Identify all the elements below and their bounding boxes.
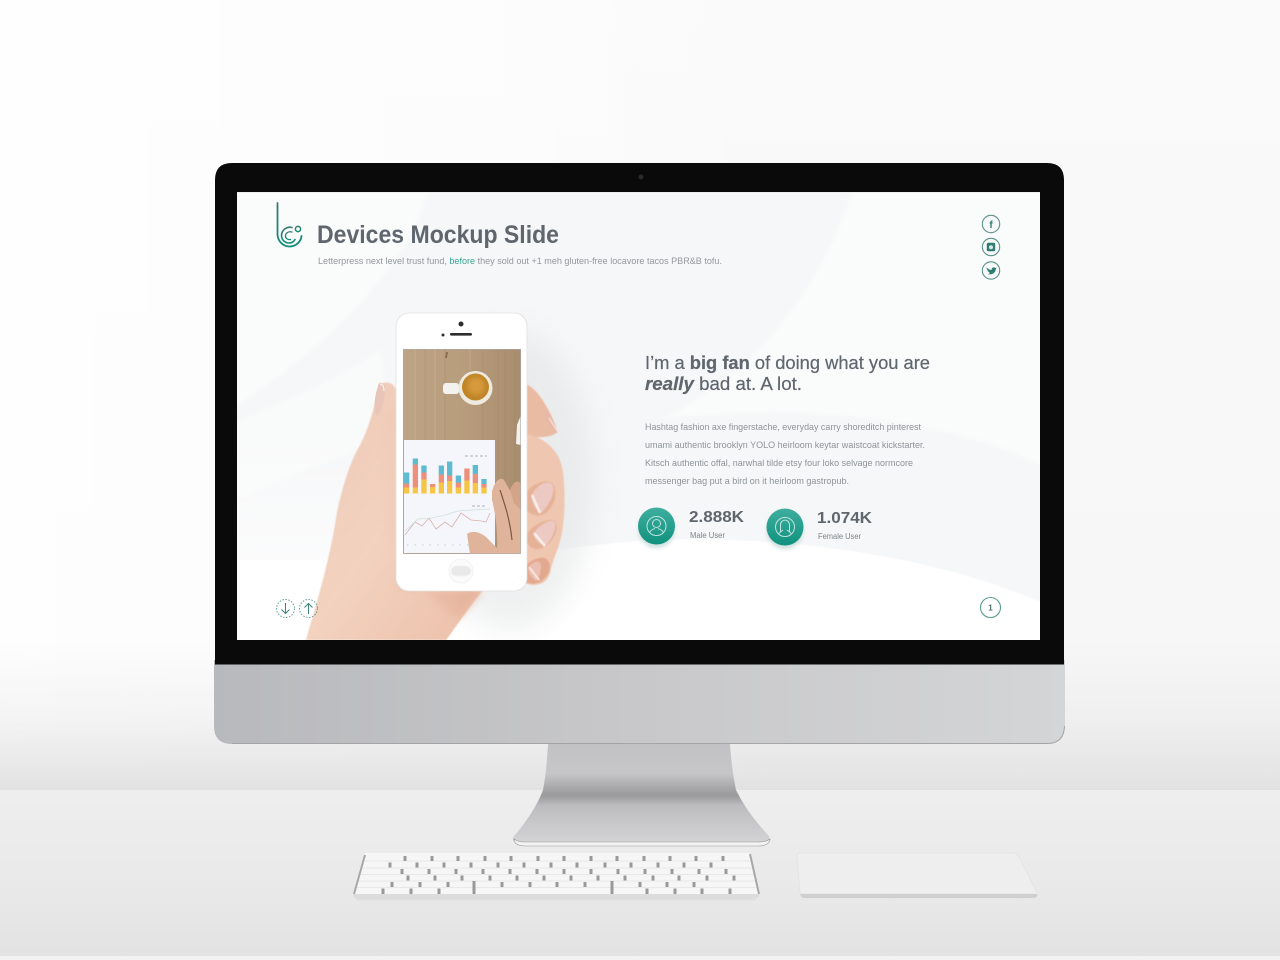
keyboard key gaps — [382, 856, 736, 894]
paper note edge — [516, 416, 520, 445]
keyboard edges — [354, 854, 759, 894]
monitor bezel — [215, 163, 1064, 664]
monitor stand — [513, 744, 770, 846]
palm shading — [434, 592, 484, 620]
keyboard body — [353, 853, 759, 898]
photo frame — [403, 349, 521, 554]
trackpad surface — [797, 853, 1037, 894]
keyboard shadow — [356, 897, 756, 900]
hand on paper — [467, 479, 521, 554]
paper chart — [404, 440, 495, 553]
finger 3 — [527, 520, 557, 549]
title: Devices Mockup Slide — [317, 221, 559, 249]
phone body — [396, 313, 527, 591]
icon: arrow up — [300, 600, 318, 618]
icon: male user — [638, 508, 675, 548]
webcam — [638, 174, 644, 180]
trackpad lip — [800, 894, 1038, 898]
body paragraph: Hashtag fashion axe fingerstache, everyday carry shoreditch pinterest — [645, 422, 921, 432]
body paragraph: umami authentic brooklyn YOLO heirloom keytar waistcoat kickstarter. — [645, 440, 925, 450]
fingers behind phone — [526, 384, 565, 586]
finger 1 — [526, 384, 558, 437]
body paragraph — [645, 422, 925, 486]
finger 4 — [526, 558, 550, 584]
knuckle — [526, 435, 565, 586]
page number — [980, 598, 1000, 618]
trackpad — [797, 853, 1038, 898]
value: 1.074K — [817, 510, 873, 527]
stat: male user — [638, 508, 745, 548]
slide background — [230, 185, 1050, 650]
keyboard row lines — [356, 861, 757, 888]
keyboard front lip — [354, 894, 759, 898]
finger 2 — [528, 482, 556, 516]
logo — [278, 203, 302, 246]
bar chart — [404, 458, 487, 494]
quote heading: really bad at. A lot. — [645, 373, 802, 394]
phone shadow — [472, 343, 588, 628]
social icons — [982, 215, 1000, 279]
monitor chin — [214, 660, 1065, 744]
line chart — [405, 456, 490, 545]
quote heading: I’m a big fan of doing what you are — [645, 352, 930, 373]
subtitle: Letterpress next level trust fund, before they sold out +1 meh gluten-free locavore tacos PBR&B tofu. — [318, 256, 722, 267]
body paragraph: messenger bag put a bird on it heirloom gastropub. — [645, 476, 849, 486]
coffee cup — [443, 371, 492, 405]
wood table — [403, 349, 521, 554]
label: Female User — [818, 532, 861, 541]
phone in hand — [306, 313, 595, 640]
label: Male User — [690, 531, 725, 540]
icon: facebook: f — [989, 220, 993, 231]
hand behind phone — [306, 383, 483, 640]
page number: 1 — [988, 604, 993, 612]
value: 2.888K — [689, 509, 745, 526]
quote heading — [645, 352, 930, 394]
icon: instagram — [982, 238, 1000, 256]
icon: twitter — [982, 262, 1000, 279]
icon: arrow down — [276, 600, 294, 618]
navigation arrows — [276, 600, 318, 618]
background: desk — [0, 790, 1280, 960]
icon: female user — [766, 508, 804, 549]
body paragraph: Kitsch authentic offal, narwhal tilde etsy four loko selvage normcore — [645, 458, 913, 468]
slide screen — [230, 185, 1050, 650]
stat: female user — [766, 508, 873, 549]
thumb nail — [375, 383, 385, 416]
phone home button — [449, 559, 473, 583]
keyboard — [353, 853, 759, 900]
monitor — [214, 163, 1065, 846]
phone speaker and camera — [442, 322, 472, 336]
phone photo — [403, 349, 521, 554]
